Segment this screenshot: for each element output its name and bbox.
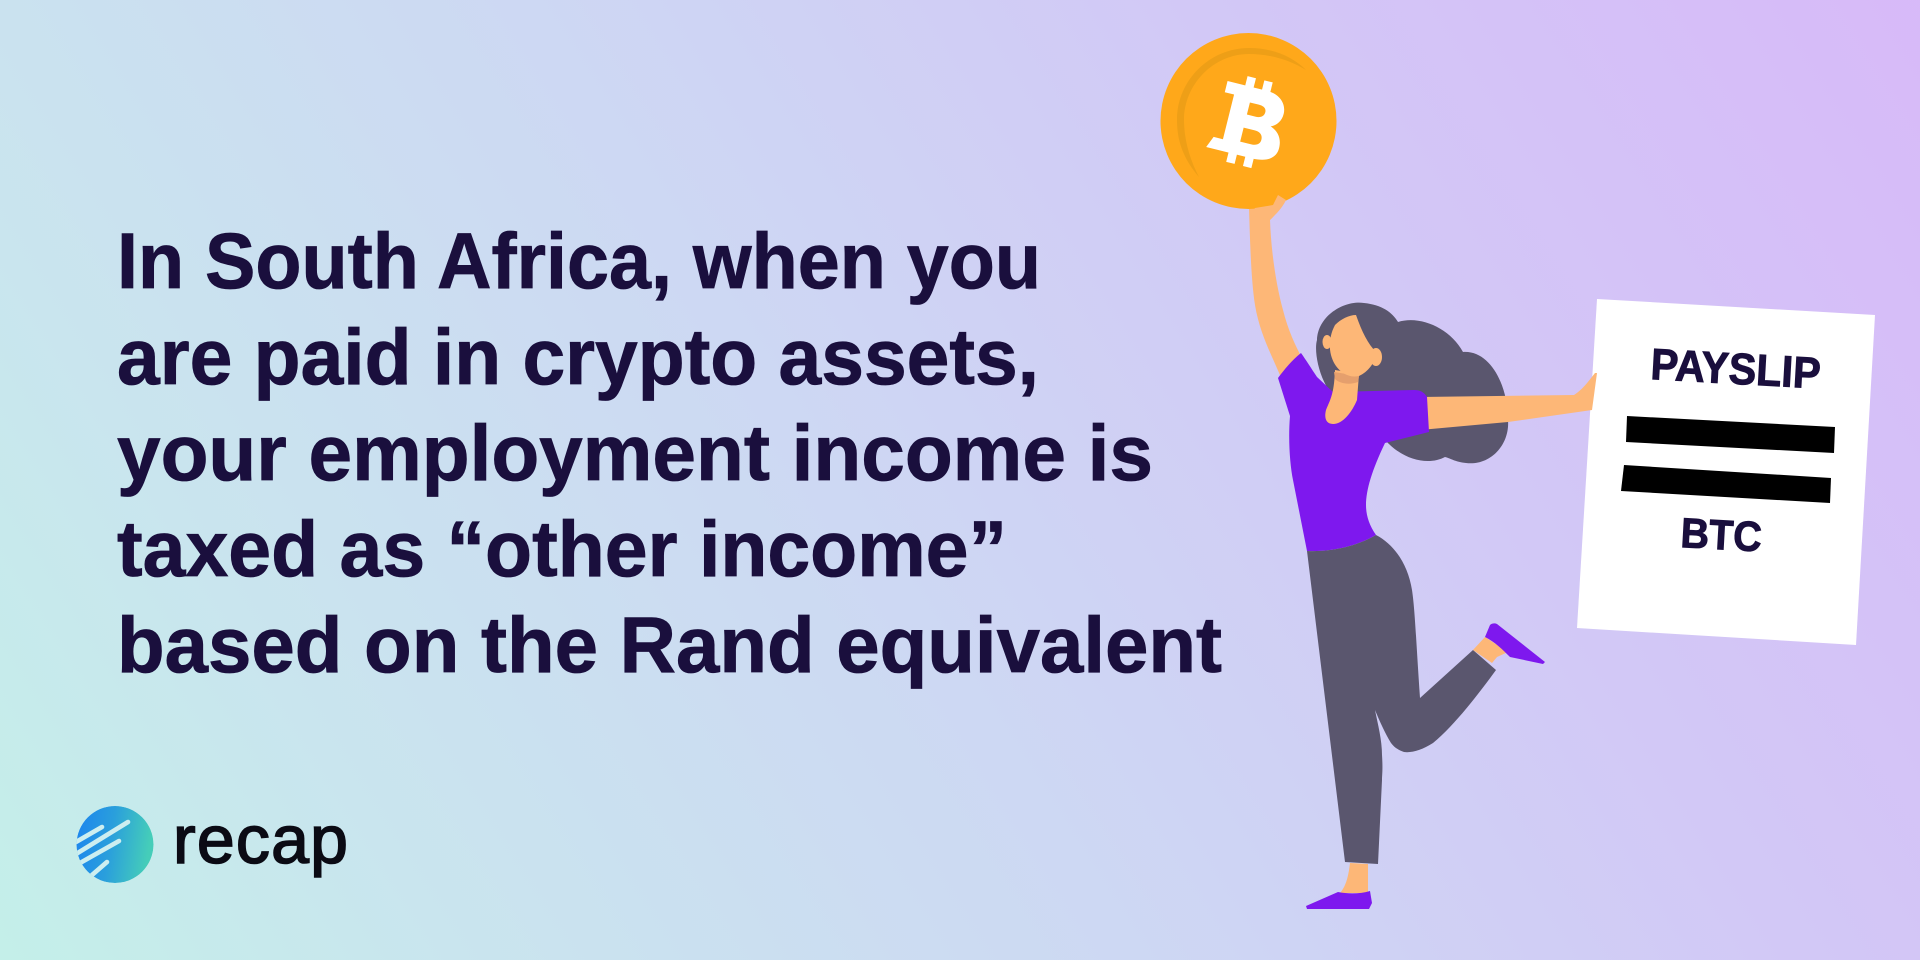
hand on coin [1250,195,1286,220]
raised arm [1249,195,1303,380]
ears [1322,335,1382,366]
headline text: taxed as “other income” [117,504,1007,593]
BTC label: BTC [1679,509,1763,561]
raised shoe [1485,623,1545,664]
outstretched arm [1420,373,1597,430]
headline text: based on the Rand equivalent [117,600,1222,689]
coin disc [1160,33,1336,209]
headline text: In South Africa, when you [117,216,1041,305]
headline text [117,216,1222,689]
headline text: are paid in crypto assets, [117,312,1039,401]
neck [1325,370,1359,424]
headline text: your employment income is [117,408,1153,497]
illustration: woman holding coin and payslip [1160,33,1875,909]
recap logo [76,802,348,883]
raised foot [1473,637,1508,663]
logo wordmark: recap [173,802,348,878]
standing foot [1340,863,1368,893]
bitcoin symbol [1204,71,1294,173]
face [1330,315,1376,377]
paper sheet [1577,299,1875,645]
black bar 1 [1626,416,1835,453]
pants [1307,535,1496,864]
standing shoe [1306,891,1372,909]
bitcoin coin [1160,33,1336,209]
logo icon [76,806,154,883]
black bar 2 [1621,465,1831,503]
payslip title: PAYSLIP [1649,340,1822,398]
coin inner crescent [1177,48,1306,177]
payslip paper [1577,299,1875,645]
chin shadow [1334,372,1359,384]
hair [1316,303,1508,463]
shirt [1278,353,1429,551]
